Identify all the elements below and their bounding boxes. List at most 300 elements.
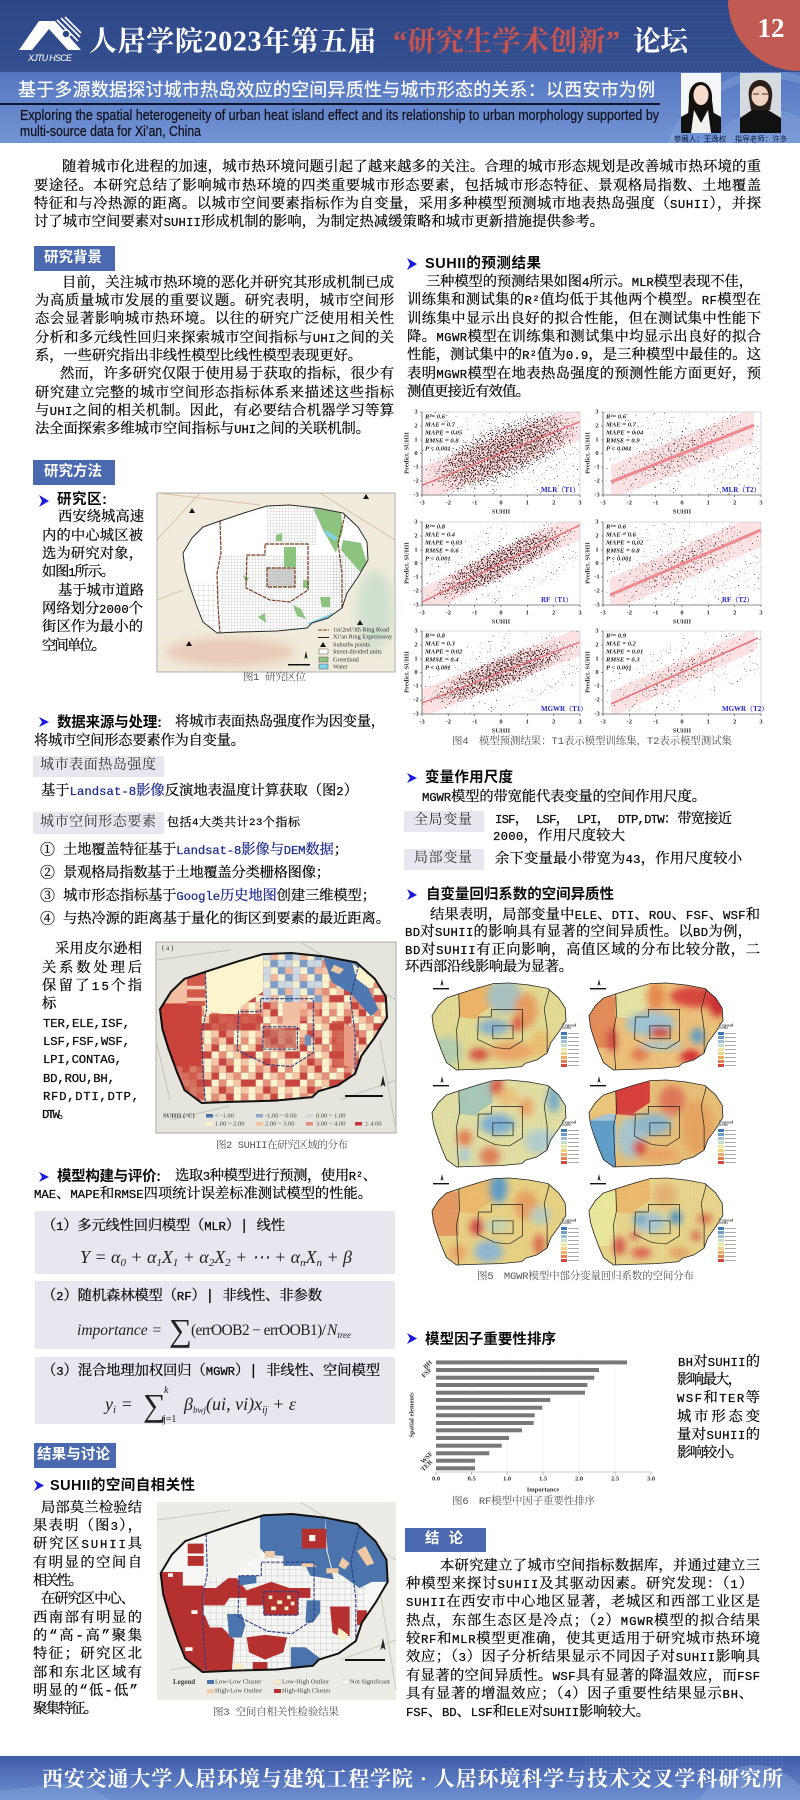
prediction text: 三种模型的预测结果如图4所示。MLR模型表现不佳，: [426, 272, 753, 291]
heterogeneity text: BD对SUHII有正向影响，高值区域的分布比较分散，二: [405, 940, 760, 959]
autocorrelation text: 研究区SUHII具: [33, 1535, 143, 1553]
icon: arrow bullet: [407, 1333, 417, 1344]
formula: RF: ∑: [169, 1312, 192, 1348]
legend: 0.00 ~ 1.00: [316, 1112, 346, 1120]
conclusion text: 本研究建立了城市空间指标数据库，并通过建立三: [440, 1556, 760, 1575]
prediction text: 测值更接近有效值。: [407, 382, 530, 401]
caption figure 2: 图2 SUHII在研究区域的分布: [216, 1138, 348, 1152]
legend: [163, 1112, 382, 1128]
formula: MLR: Y = α: [80, 1247, 120, 1267]
pearson text: DTW。: [42, 1107, 72, 1123]
study area text: 空间单位。: [42, 636, 106, 655]
legend: Suburbs points: [333, 642, 371, 648]
main title: [89, 26, 690, 58]
scatter: MGWR T2: MGWR（T2）: [722, 705, 768, 713]
importance text: 影响较小。: [677, 1444, 743, 1462]
subheading with text: 数据来源与处理:: [57, 713, 162, 731]
heading: 研究背景: [34, 246, 115, 271]
figure 1: study area map: [157, 493, 395, 672]
landsat line: 基于Landsat-8影像反演地表温度计算获取（图2）: [41, 781, 358, 800]
formula: RF: N: [327, 1322, 337, 1339]
icon: arrow bullet: [39, 495, 49, 507]
heading: 结果与讨论: 结果与讨论: [37, 1445, 110, 1463]
legend: Legend: [173, 1678, 195, 1686]
main title: 论坛: [633, 26, 690, 58]
icon: arrow bullet: [407, 258, 417, 270]
scatter: MGWR T2: MAE = 0.2: [605, 640, 637, 648]
scatter: MGWR T1: P < 0.001: [425, 664, 451, 672]
scatter: MGWR T1: MAPE = 0.02: [424, 648, 463, 656]
scatter: RF T1: [404, 520, 582, 624]
formula: MGWR: i: [113, 1404, 116, 1416]
bar chart: factor importance: Spatial elements: [408, 1392, 416, 1438]
subtitle band: [0, 72, 800, 143]
scatter: MGWR T2: [584, 628, 768, 734]
importance text: BH对SUHII的: [678, 1353, 760, 1371]
formula: MGWR: ∑: [143, 1387, 166, 1423]
background text: 与UHI之间的相关机制。因此，有必要结合机器学习等算: [35, 402, 394, 420]
bar chart: factor importance: 0.5: [468, 1476, 477, 1482]
heading: 结论: 结 论: [425, 1529, 464, 1547]
section: conclusion: [405, 1528, 761, 1721]
formula: MLR: n: [300, 1257, 306, 1269]
scatter: MLR T1: RMSE = 0.8: [424, 438, 459, 444]
icon: arrow bullet: [39, 717, 49, 727]
scatter: RF T2: P < 0.001: [606, 556, 632, 562]
background text: 态会显著影响城市热环境。以往的研究广泛使用相关性: [35, 309, 394, 328]
scatter: MLR T1: MLR（T1）: [541, 486, 580, 494]
scatter: RF T2: MAE = 0.6: [605, 532, 637, 538]
intro paragraph: 特征和与冷热源的距离。以城市空间要素指标作为自变量，采用多种模型预测城市地表热岛强度（SUHII），并探: [34, 194, 761, 213]
formula: MLR: n: [317, 1257, 323, 1269]
scatter: MGWR T1: R²= 0.8: [424, 632, 446, 640]
background text: 研究建立完整的城市空间形态指标体系来描述这些指标: [35, 383, 395, 402]
footer banner: 西安交通大学人居环境与建筑工程学院 · 人居环境科学与技术交叉学科研究所: [42, 1767, 783, 1791]
numbered list: ②: [40, 864, 55, 882]
formula: MGWR: β: [184, 1394, 193, 1414]
main title: “研究生学术创新”: [393, 26, 620, 58]
icon: arrow bullet: [407, 773, 417, 783]
formula: MGWR: j=1: [162, 1414, 176, 1425]
conclusion text: FSF、BD、LSF和ELE对SUHII影响较大。: [406, 1703, 650, 1721]
pearson text: 采用皮尔逊相: [55, 940, 142, 958]
legend: Low-Low Cluster: [215, 1678, 262, 1686]
heat map 2: Legend: [719, 1022, 734, 1028]
heading: 研究方法: 研究方法: [44, 462, 102, 480]
background text: 分析和多元线性回归来探索城市空间指标与UHI之间的关: [35, 328, 394, 347]
legend: 2.00 ~ 3.00: [265, 1120, 295, 1128]
label: 城市空间形态要素: [33, 812, 164, 834]
note: 23 indicators: 包括4大类共计23个指标: [167, 814, 301, 830]
subheading with text: 选取3种模型进行预测，使用R²、: [175, 1166, 377, 1185]
background text: [35, 273, 395, 438]
legend: SUHII (°C): [163, 1112, 195, 1120]
conclusion text: 具有显著的增温效应；（4）因子重要性结果显示BH、: [406, 1684, 753, 1703]
icon: north arrow: [288, 651, 310, 666]
heat map 1: Legend: [562, 1022, 577, 1028]
header banner: [0, 0, 800, 143]
scatter: RF T2: RMSE = 0.8: [605, 548, 640, 554]
subheading: 研究区: 研究区:: [57, 490, 107, 508]
importance text: 影响最大，: [677, 1371, 742, 1389]
subheading: 变量作用尺度: [425, 768, 514, 786]
heading: 结论: [405, 1528, 486, 1552]
heterogeneity text: 环西部沿线影响最为显著。: [405, 957, 573, 976]
figure 4: scatter plots: [404, 392, 768, 734]
numbered list: [40, 840, 390, 928]
study area text: 内的中心城区被: [42, 527, 143, 545]
legend: 1.00 ~ 2.00: [215, 1120, 245, 1128]
bar chart: factor importance: BH: [422, 1359, 434, 1371]
formula: MLR: X: [305, 1247, 318, 1267]
numbered list: 城市形态指标基于Google历史地图创建三维模型；: [63, 886, 376, 905]
icon: north arrow and scale: [345, 1075, 386, 1097]
study area text: 街区作为最小的: [42, 618, 143, 636]
subheading: 模型因子重要性排序: [425, 1330, 556, 1348]
legend: High-High Cluster: [282, 1688, 331, 1694]
scatter: MLR T2: RMSE = 0.9: [605, 438, 640, 444]
subheading: 自变量回归系数的空间异质性: [426, 885, 614, 903]
background text: 法全面探索多维城市空间指标与UHI之间的关联机制。: [35, 419, 370, 438]
formula: MLR: X: [161, 1247, 174, 1267]
scale intro: MGWR模型的带宽能代表变量的空间作用尺度。: [422, 787, 706, 806]
heat map 1: [431, 979, 579, 1070]
legend: High-Low Outlier: [215, 1688, 263, 1694]
section: SUHII prediction: [407, 254, 762, 401]
heat map 4: [589, 1076, 736, 1167]
intro paragraph: 讨了城市空间要素对SUHII形成机制的影响，为制定热减缓策略和城市更新措施提供参考。: [34, 212, 604, 231]
prediction text: [407, 272, 762, 401]
autocorrelation text: 特征；研究区北: [33, 1645, 142, 1663]
section: coefficient heterogeneity: [405, 885, 760, 976]
autocorrelation text: 有明显的空间自: [33, 1553, 142, 1572]
scatter: MLR T2: MAPE = 0.04: [605, 430, 644, 436]
footer banner: [0, 1756, 800, 1800]
formula: RF: (errOOB2 − errOOB1)/: [191, 1322, 327, 1339]
bar chart: factor importance: FSF: [420, 1366, 434, 1380]
bar chart: factor importance: TER: [420, 1459, 434, 1473]
bar chart: factor importance: 1.5: [539, 1476, 548, 1482]
autocorrelation text: 在研究区中心、: [41, 1590, 135, 1608]
model box: RF: [35, 1281, 395, 1349]
prediction text: 训练集和测试集的R²值均低于其他两个模型。RF模型在: [407, 290, 761, 309]
label: 城市表面热岛强度: 城市表面热岛强度: [40, 756, 156, 774]
model box: MGWR: [35, 1357, 395, 1425]
legend: < -1.00: [215, 1112, 234, 1120]
pearson text: 标：: [42, 995, 62, 1013]
legend: [173, 1678, 390, 1694]
numbered list: 与热冷源的距离基于量化的街区到要素的最近距离。: [63, 909, 390, 928]
scatter: MLR T1: MAPE = 0.05: [424, 430, 463, 436]
formula: MLR: + α: [126, 1247, 157, 1267]
model box: RF: （2）随机森林模型（RF）| 非线性、非参数: [42, 1286, 322, 1305]
legend: Not Significant: [350, 1678, 390, 1686]
conclusion text: 热点，东部生态区是冷点；（2）MGWR模型的拟合结果: [406, 1611, 760, 1630]
autocorrelation text: 部和东北区域有: [33, 1664, 142, 1682]
prediction text: 训练集中显示出良好的拟合性能，但在测试集中性能下: [407, 310, 761, 328]
english subtitle: multi-source data for Xi’an, China: [20, 124, 202, 140]
heat map 3: Legend: [562, 1120, 577, 1124]
formula: MLR: + β: [322, 1247, 352, 1267]
model box: MLR: [35, 1211, 395, 1274]
icon: arrow bullet: [39, 1172, 49, 1182]
local variable text: 余下变量最小带宽为43，作用尺度较小: [495, 849, 743, 868]
formula: MGWR: y: [105, 1394, 113, 1414]
scatter: MLR T1: [404, 410, 582, 514]
study area text: 如图1所示。: [42, 563, 115, 581]
autocorrelation text: 果表明（图3），: [33, 1516, 142, 1535]
scatter: MLR T1: R²= 0.6: [424, 414, 446, 420]
subheading with text: [34, 712, 385, 750]
study area text: 西安绕城高速: [58, 507, 145, 526]
caption figure 5: 图5 MGWR模型中部分变量回归系数的空间分布: [477, 1269, 694, 1283]
autocorrelation text: [33, 1498, 143, 1718]
legend: ≥ 4.00: [365, 1120, 382, 1128]
pearson text: 关系数处理后: [42, 959, 142, 977]
figure 3: autocorrelation map: [157, 1502, 396, 1700]
formula: MGWR: (ui, vi)x: [206, 1394, 262, 1415]
formula: MLR: 2: [209, 1257, 215, 1269]
heterogeneity text: 结果表明，局部变量中ELE、DTI、ROU、FSF、WSF和: [430, 905, 760, 924]
label: 全局变量: [404, 811, 484, 832]
scatter: RF T1: RMSE = 0.6: [424, 548, 459, 554]
legend: Street-divided units: [333, 648, 382, 656]
pearson text: TER,ELE,ISF,: [43, 1017, 130, 1031]
importance text: [677, 1353, 761, 1462]
formula: MGWR: k: [164, 1385, 169, 1396]
autocorrelation text: 西南部有明显的: [33, 1609, 142, 1627]
global variable text: [493, 810, 732, 845]
intro paragraph: [34, 157, 761, 231]
formula: MGWR: + ε: [268, 1394, 297, 1414]
subheading with text: [34, 1166, 377, 1203]
autocorrelation text: 聚集特征。: [33, 1700, 98, 1718]
scatter: MGWR T2: R²= 0.9: [605, 632, 627, 640]
formula: MGWR: [103, 1385, 297, 1425]
legend: Xi’an Ring Expressway: [333, 634, 393, 640]
figure 2: SUHII map: ( a ): [162, 944, 174, 952]
heat map 4: Legend: [719, 1120, 734, 1124]
bar chart: factor importance: 1.0: [503, 1476, 511, 1482]
prediction text: 性能，测试集中的R²值为0.9，是三种模型中最佳的。这: [407, 345, 761, 364]
intro paragraph: 要途径。本研究总结了影响城市热环境的四类重要城市形态要素，包括城市形态特征、景观格局指数、土地覆盖: [34, 176, 761, 195]
subheading: SUHII的预测结果: [425, 254, 542, 272]
english subtitle: Exploring the spatial heterogeneity of urban heat island effect and its relationship to urban morphology supported by: [20, 108, 660, 124]
legend: 1st/2nd/3th Ring Road: [333, 626, 390, 634]
formula: MLR: 1: [173, 1257, 178, 1269]
formula: MLR: + ⋯ + α: [231, 1247, 301, 1267]
caption figure 3: 图3 空间自相关性检验结果: [213, 1705, 340, 1719]
pearson text: [42, 940, 142, 1123]
caption figure 6: 图6 RF模型中因子重要性排序: [452, 1494, 596, 1508]
heading: 研究方法: [33, 460, 115, 485]
heat map 5: [432, 1173, 579, 1265]
formula: MGWR: =: [116, 1394, 133, 1414]
scatter: RF T1: RF（T1）: [541, 596, 572, 604]
scatter: RF T2: MAPE = 0.02: [605, 540, 644, 546]
formula: RF: [77, 1312, 351, 1348]
formula: MLR: + α: [178, 1247, 209, 1267]
scatter: MLR T2: [585, 410, 762, 514]
label: 局部变量: [404, 849, 484, 870]
section: importance ranking: [407, 1330, 761, 1494]
conclusion text: 有显著的空间异质性。WSF具有显著的降温效应，而FSF: [406, 1666, 760, 1685]
subheading: SUHII的空间自相关性: [50, 1476, 195, 1494]
pearson text: LPI,CONTAG,: [43, 1053, 122, 1067]
bar chart: factor importance: 3.0: [647, 1476, 655, 1482]
section: model construction: [34, 1166, 395, 1425]
caption figure 1: 图1 研究区位: [243, 670, 306, 684]
pearson text: 保留了15个指: [42, 977, 142, 995]
scatter: MGWR T1: RMSE = 0.4: [424, 656, 459, 664]
prediction text: 表明MGWR模型在地表热岛强度的预测性能方面更好，预: [407, 364, 762, 383]
study area text: [42, 507, 145, 655]
background text: 目前，关注城市热环境的恶化并研究其形成机制已成: [62, 273, 394, 292]
scatter: MGWR T2: RMSE = 0.3: [605, 656, 640, 664]
portrait: advisor: 指导老师：许多: [735, 134, 788, 144]
scatter: MLR T2: MAE = 0.7: [605, 422, 637, 428]
formula: RF: importance =: [77, 1322, 162, 1339]
section: results, spatial autocorrelation: [33, 1443, 195, 1718]
importance text: 量对SUHII的: [677, 1426, 760, 1444]
portrait: advisor: [735, 73, 788, 144]
bar chart: factor importance: Importance: [527, 1486, 559, 1494]
scatter: MGWR T1: MGWR（T1）: [541, 705, 587, 713]
prediction text: 降。MGWR模型在训练集和测试集中均显示出良好的拟合: [407, 327, 761, 346]
icon: arrow bullet: [407, 889, 417, 900]
scatter: RF T1: MAE = 0.4: [424, 532, 456, 538]
scatter: MGWR T2: P < 0.001: [606, 664, 632, 672]
scatter: MGWR T1: MAE = 0.3: [424, 640, 456, 648]
pearson text: RFD,DTI,DTP,: [43, 1090, 139, 1104]
icon: north arrow and scale: [345, 1638, 386, 1661]
english subtitle: [20, 108, 660, 140]
formula: RF: tree: [337, 1330, 351, 1340]
scatter: MLR T1: MAE = 0.7: [424, 422, 456, 428]
heat map 6: [589, 1174, 736, 1265]
bar chart: factor importance: [408, 1358, 655, 1494]
autocorrelation text: 局部莫兰检验结: [41, 1498, 142, 1517]
numbered list: 景观格局指数基于土地覆盖分类栅格图像；: [63, 863, 330, 882]
numbered list: ④: [40, 910, 55, 928]
pearson text: BD,ROU,BH,: [43, 1072, 115, 1086]
scatter: RF T2: RF（T2）: [722, 596, 754, 604]
conclusion text: SUHII在西安市中心地区显著，老城区和西部工业区是: [406, 1592, 760, 1611]
portrait: participant: [674, 73, 727, 144]
heat map 5: Legend: [562, 1218, 577, 1222]
scatter: RF T2: [585, 520, 762, 624]
legend: -1.00 ~ 0.00: [265, 1112, 297, 1120]
autocorrelation text: 明显的“低-低”: [33, 1682, 138, 1700]
section: data source: [33, 712, 390, 1123]
formula: MLR: 0: [120, 1257, 126, 1269]
scatter: MLR T1: P < 0.001: [425, 446, 451, 452]
model box: MLR: （1）多元线性回归模型（MLR）| 线性: [42, 1216, 285, 1235]
conclusion text: 效应；（3）因子分析结果显示不同因子对SUHII影响具: [406, 1648, 761, 1666]
scatter: RF T2: R²= 0.6: [605, 524, 627, 530]
heading: 结果与讨论: [34, 1443, 116, 1468]
scatter: RF T1: MAPE = 0.03: [424, 540, 463, 546]
study area text: 选为研究对象，: [42, 545, 143, 563]
formula: MGWR: bwj: [193, 1405, 207, 1415]
numbered list: ①: [40, 842, 55, 860]
bar chart: factor importance: 2.5: [611, 1476, 620, 1482]
numbered list: ③: [40, 888, 55, 906]
label: 全局变量: 全局变量: [414, 811, 472, 829]
scatter: RF T1: P < 0.001: [425, 556, 451, 562]
label: 局部变量: 局部变量: [414, 849, 472, 867]
study area text: 网络划分2000个: [42, 600, 143, 618]
subheading with text: 模型构建与评价:: [57, 1167, 161, 1185]
main title: 人居学院2023年第五届: [89, 26, 376, 58]
legend: [318, 626, 393, 670]
importance text: WSF和TER等: [677, 1389, 760, 1407]
subheading with text: MAE、MAPE和RMSE四项统计误差标准测试模型的性能。: [34, 1184, 372, 1203]
formula: MLR: X: [213, 1247, 226, 1267]
formula: MLR: 2: [225, 1257, 231, 1269]
heat map 2: [589, 979, 736, 1070]
conclusion text: [406, 1556, 761, 1721]
section: variable scale: [404, 768, 743, 870]
logo: [19, 17, 81, 63]
background text: 然而，许多研究仅限于使用易于获取的指标，很少有: [60, 364, 394, 383]
subheading with text: 将城市表面热岛强度作为因变量，: [175, 712, 385, 731]
scatter: MGWR T1: [404, 628, 587, 734]
autocorrelation text: 的“高-高”聚集: [33, 1626, 142, 1645]
scatter: RF T1: R²= 0.8: [424, 524, 446, 530]
scatter: MLR T2: P < 0.001: [606, 446, 632, 452]
scatter: MLR T2: R²= 0.6: [605, 414, 627, 420]
icon: arrow bullet: [34, 1480, 44, 1491]
model box: MGWR: （3）混合地理加权回归（MGWR）| 非线性、空间模型: [42, 1361, 380, 1380]
legend: Low-High Outlier: [282, 1678, 330, 1686]
legend: Greenland: [333, 656, 360, 664]
heterogeneity text: BD对SUHII的影响具有显著的空间异质性。以BD为例，: [405, 922, 752, 941]
bar chart: factor importance: 2.0: [575, 1476, 583, 1482]
corner badge: 12: [758, 13, 784, 43]
scatter: MLR T2: MLR（T2）: [722, 486, 760, 494]
study area text: 基于城市道路: [58, 581, 144, 600]
legend: Water: [333, 664, 348, 670]
background text: 为高质量城市发展的重要议题。研究表明，城市空间形: [35, 291, 394, 310]
figure 2: SUHII map: [156, 942, 396, 1133]
conclusion text: 种模型来探讨SUHII及其驱动因素。研究发现：（1）: [406, 1574, 753, 1593]
section: 研究背景: [34, 246, 395, 438]
formula: MLR: 1: [156, 1257, 162, 1269]
section: 研究方法: [33, 460, 145, 655]
label: 城市表面热岛强度: [33, 756, 164, 777]
scatter: MGWR T2: MAPE = 0.01: [605, 648, 643, 656]
legend: 3.00 ~ 4.00: [316, 1120, 346, 1128]
bar chart: factor importance: WSF: [420, 1451, 434, 1465]
corner badge: [728, 0, 800, 71]
pearson text: LSF,FSF,WSF,: [43, 1035, 130, 1049]
global variable text: 2000，作用尺度较大: [493, 826, 625, 845]
numbered list: 土地覆盖特征基于Landsat-8影像与DEM数据；: [63, 840, 348, 859]
heading: 研究背景: 研究背景: [44, 248, 102, 266]
caption figure 4: 图4 模型预测结果：T1表示模型训练集，T2表示模型测试集: [452, 734, 732, 748]
global variable text: ISF， LSF， LPI， DTP,DTW：带宽接近: [495, 810, 732, 828]
figure 5: coefficient maps: [431, 979, 736, 1265]
portrait: participant: 参展人：王逸权: [674, 134, 727, 144]
bar chart: factor importance: 0.0: [432, 1476, 440, 1482]
intro paragraph: 随着城市化进程的加速，城市热环境问题引起了越来越多的关注。合理的城市形态规划是改善城市热环境的重: [62, 157, 761, 176]
autocorrelation text: 相关性。: [33, 1572, 83, 1590]
logo: XJTU HSCE: [27, 53, 73, 63]
conclusion text: 较RF和MLR模型更准确，使其更适用于研究城市热环境: [406, 1629, 760, 1648]
chinese subtitle: 基于多源数据探讨城市热岛效应的空间异质性与城市形态的关系：以西安市为例: [18, 80, 655, 100]
heat map 6: Legend: [719, 1218, 734, 1222]
